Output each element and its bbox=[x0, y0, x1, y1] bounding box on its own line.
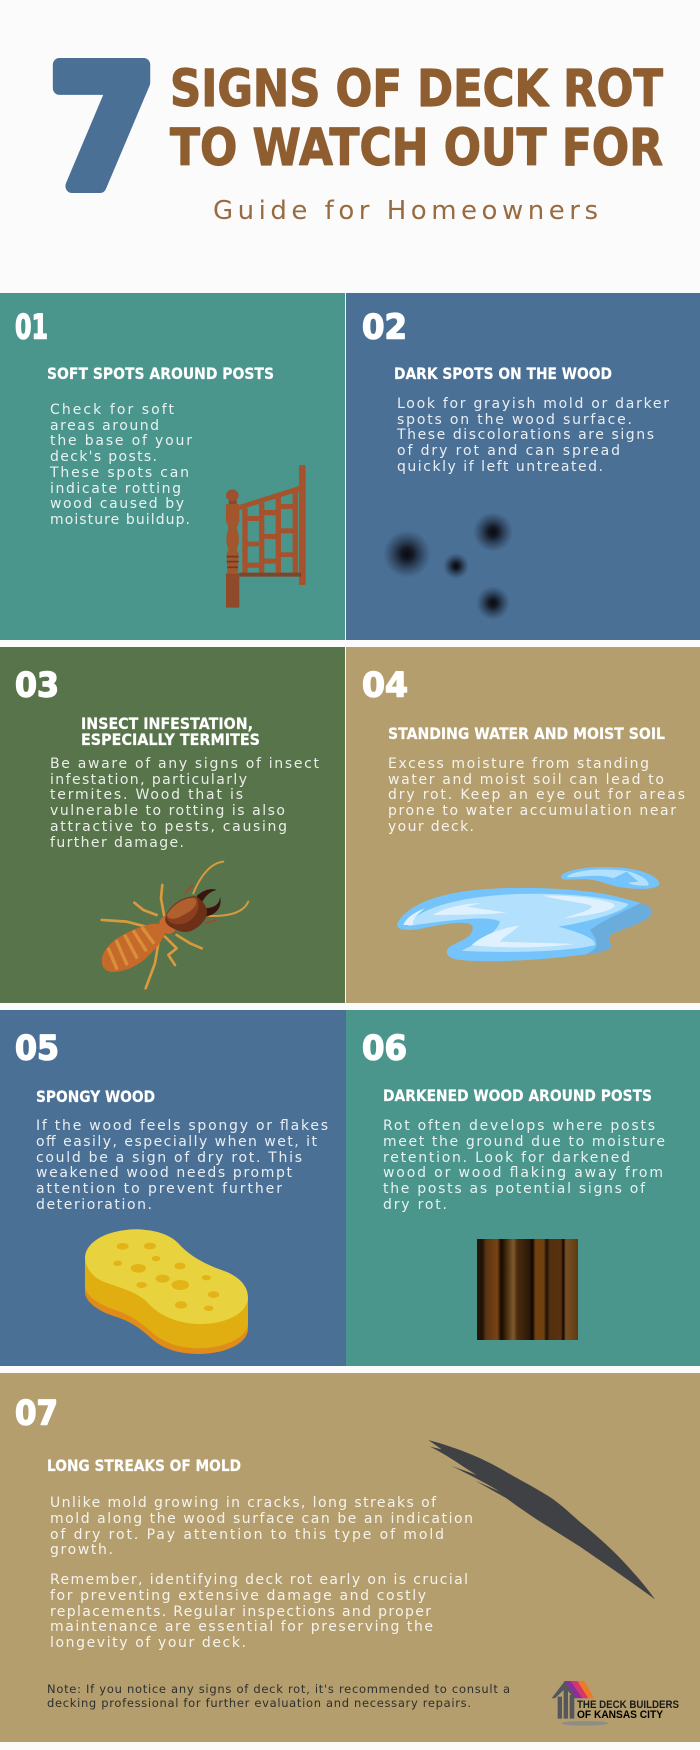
body 03: infestation, particularly bbox=[50, 772, 247, 788]
number 03: 03 bbox=[15, 666, 59, 706]
body 07: growth. bbox=[50, 1542, 113, 1558]
closing paragraph: maintenance are essential for preserving the bbox=[50, 1619, 433, 1635]
closing paragraph: replacements. Regular inspections and proper bbox=[50, 1604, 431, 1620]
heading 07: LONG STREAKS OF MOLD bbox=[47, 1456, 241, 1475]
icon: mold streak bbox=[428, 1440, 655, 1599]
body 06: dry rot. bbox=[383, 1197, 447, 1213]
body 06 bbox=[383, 1118, 665, 1213]
panel: 06 darkened wood bbox=[346, 1010, 700, 1366]
heading 02: DARK SPOTS ON THE WOOD bbox=[394, 364, 612, 383]
body 06: Rot often develops where posts bbox=[383, 1118, 655, 1134]
panel: 02 dark spots bbox=[346, 293, 700, 640]
body 01: the base of your bbox=[50, 433, 192, 449]
body 04 bbox=[388, 756, 685, 835]
body 03 bbox=[50, 756, 320, 851]
body 02: These discolorations are signs bbox=[396, 427, 654, 443]
panel: 03 insects bbox=[0, 647, 345, 1003]
panel: 01 soft spots bbox=[0, 293, 345, 640]
heading 05: SPONGY WOOD bbox=[36, 1087, 155, 1106]
closing paragraph: Remember, identifying deck rot early on is crucial bbox=[50, 1572, 468, 1588]
body 05: off easily, especially when wet, it bbox=[36, 1134, 317, 1150]
note: Note: If you notice any signs of deck rot, it's recommended to consult a bbox=[47, 1682, 510, 1696]
body 04: water and moist soil can lead to bbox=[388, 772, 664, 788]
body 05: weakened wood needs prompt bbox=[36, 1165, 292, 1181]
body 01: deck's posts. bbox=[50, 449, 157, 465]
body 04: prone to water accumulation near bbox=[388, 803, 676, 819]
body 02: Look for grayish mold or darker bbox=[397, 396, 669, 412]
heading 03: ESPECIALLY TERMITES bbox=[81, 730, 260, 749]
body 03: vulnerable to rotting is also bbox=[50, 803, 285, 819]
panel background 07 bbox=[0, 1373, 700, 1742]
body 01: Check for soft bbox=[50, 402, 174, 418]
body 04: your deck. bbox=[388, 819, 474, 835]
heading 03 bbox=[81, 714, 260, 749]
logo text: THE DECK BUILDERS bbox=[577, 1699, 679, 1711]
body 07 bbox=[50, 1495, 473, 1558]
number 01: 01 bbox=[15, 308, 48, 348]
panel: 04 standing water bbox=[346, 647, 700, 1003]
body 05: If the wood feels spongy or flakes bbox=[36, 1118, 328, 1134]
body 02: of dry rot and can spread bbox=[397, 443, 620, 459]
body 05: attention to prevent further bbox=[36, 1181, 282, 1197]
panel background 01 bbox=[0, 293, 345, 640]
heading 03: INSECT INFESTATION, bbox=[81, 714, 253, 733]
closing paragraph: for preventing extensive damage and costly bbox=[50, 1588, 426, 1604]
note bbox=[47, 1682, 510, 1710]
note: decking professional for further evaluation and necessary repairs. bbox=[47, 1696, 471, 1710]
icon: water puddle bbox=[397, 867, 659, 961]
body 06: meet the ground due to moisture bbox=[383, 1134, 665, 1150]
image: dark wood texture bbox=[477, 1239, 578, 1340]
number 07: 07 bbox=[15, 1394, 58, 1434]
body 04: Excess moisture from standing bbox=[388, 756, 649, 772]
number 02: 02 bbox=[362, 308, 407, 348]
body 02 bbox=[396, 396, 669, 475]
heading 01: SOFT SPOTS AROUND POSTS bbox=[47, 364, 274, 383]
body 06: wood or wood flaking away from bbox=[383, 1165, 663, 1181]
panel: 07 long streaks of mold bbox=[0, 1373, 700, 1742]
panel background 05 bbox=[0, 1010, 346, 1366]
body 01: areas around bbox=[50, 418, 159, 434]
body 01: These spots can bbox=[49, 465, 189, 481]
body 05 bbox=[36, 1118, 328, 1213]
panel background 02 bbox=[346, 293, 700, 640]
body 06: retention. Look for darkened bbox=[383, 1150, 630, 1166]
panel: 05 spongy wood bbox=[0, 1010, 346, 1366]
header bbox=[49, 33, 663, 226]
body 03: Be aware of any signs of insect bbox=[50, 756, 320, 772]
body 01: wood caused by bbox=[50, 496, 184, 512]
icon: dark rot spots bbox=[383, 512, 513, 620]
panel background 06 bbox=[346, 1010, 700, 1366]
heading 06: DARKENED WOOD AROUND POSTS bbox=[383, 1086, 652, 1105]
body 07: Unlike mold growing in cracks, long streaks of bbox=[50, 1495, 437, 1511]
panel background 04 bbox=[346, 647, 700, 1003]
body 01: indicate rotting bbox=[50, 481, 181, 497]
logo text bbox=[577, 1699, 679, 1721]
logo bbox=[552, 1681, 679, 1726]
body 04: dry rot. Keep an eye out for areas bbox=[388, 787, 685, 803]
body 05: could be a sign of dry rot. This bbox=[36, 1150, 302, 1166]
body 03: further damage. bbox=[50, 835, 184, 851]
subtitle: Guide for Homeowners bbox=[213, 196, 598, 226]
icon: termite bbox=[102, 862, 248, 988]
body 02: spots on the wood surface. bbox=[397, 412, 632, 428]
body 01: moisture buildup. bbox=[50, 512, 190, 528]
icon: wooden railing bbox=[226, 465, 306, 608]
closing paragraph bbox=[50, 1572, 468, 1651]
title bbox=[170, 60, 663, 178]
number 06: 06 bbox=[362, 1028, 407, 1068]
closing paragraph: longevity of your deck. bbox=[50, 1635, 246, 1651]
number 04: 04 bbox=[362, 666, 408, 706]
body 01 bbox=[49, 402, 192, 528]
body 03: attractive to pests, causing bbox=[50, 819, 287, 835]
body 07: of dry rot. Pay attention to this type of mold bbox=[50, 1527, 444, 1543]
icon: sponge bbox=[85, 1229, 248, 1354]
logo text: OF KANSAS CITY bbox=[577, 1709, 664, 1721]
logo house bbox=[552, 1681, 608, 1726]
heading 04: STANDING WATER AND MOIST SOIL bbox=[388, 724, 665, 743]
number 05: 05 bbox=[15, 1028, 59, 1068]
body 07: mold along the wood surface can be an indication bbox=[50, 1511, 473, 1527]
body 03: termites. Wood that is bbox=[50, 787, 243, 803]
big number 7: 7 bbox=[49, 33, 156, 226]
body 05: deterioration. bbox=[36, 1197, 152, 1213]
body 06: the posts as potential signs of bbox=[383, 1181, 646, 1197]
body 02: quickly if left untreated. bbox=[397, 459, 603, 475]
panel background 03 bbox=[0, 647, 345, 1003]
